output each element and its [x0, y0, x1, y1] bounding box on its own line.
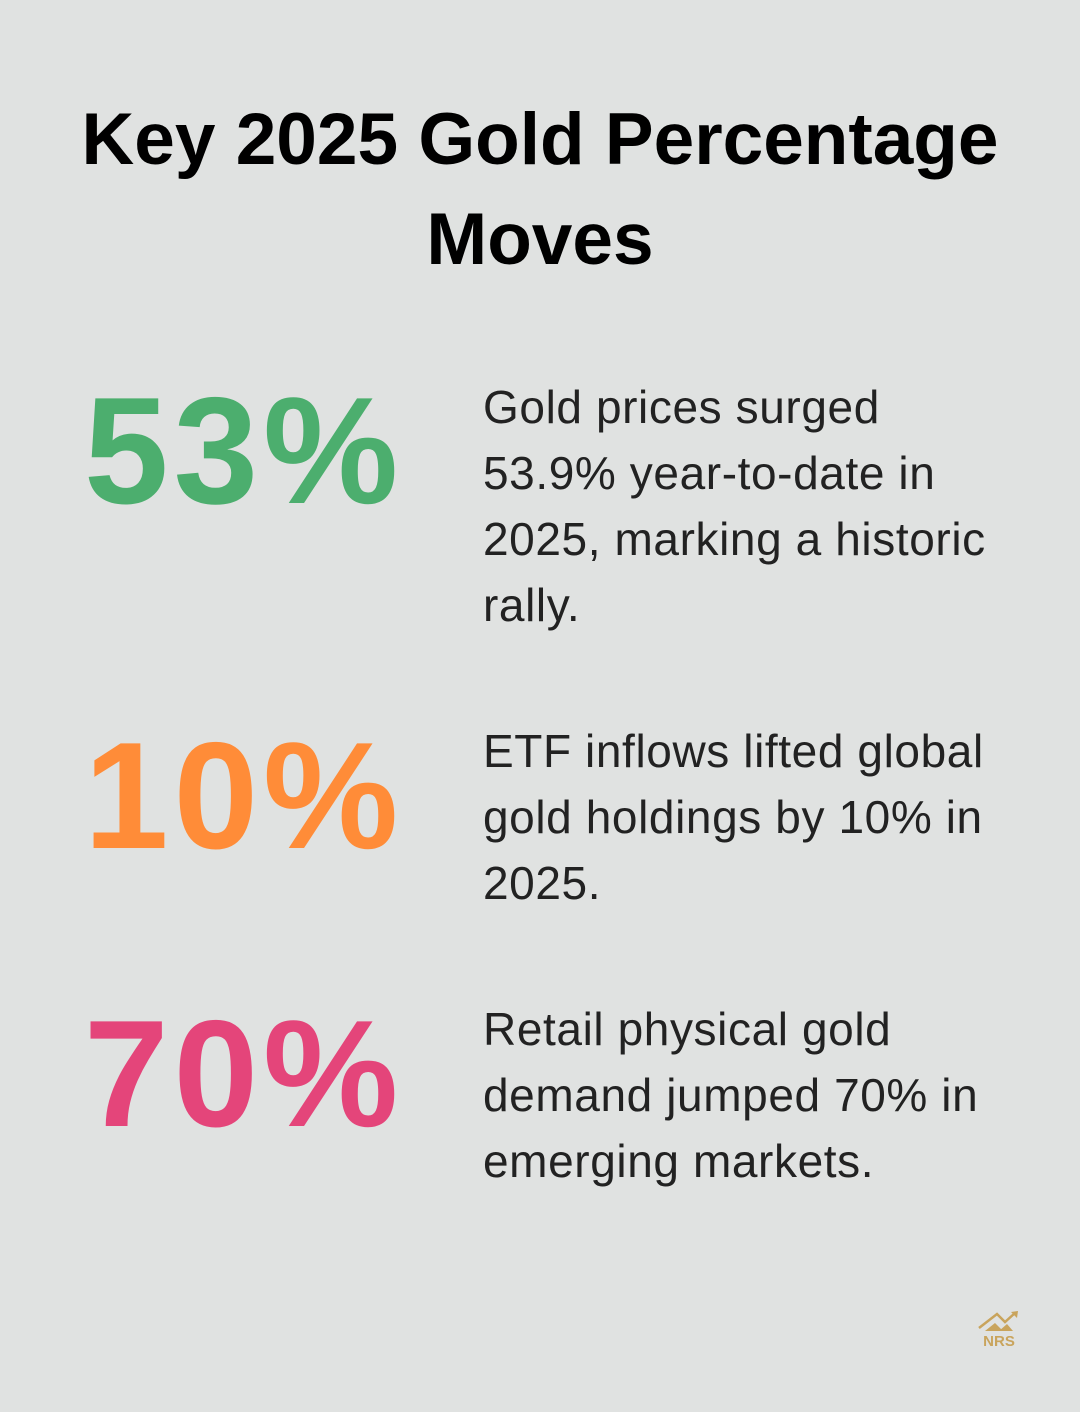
text: 70% description: demand jumped 70% in [483, 1069, 978, 1121]
text: 53% description: 2025, marking a historic [483, 513, 986, 565]
text: 10% description: 2025. [483, 857, 601, 909]
stat: 53%: 53% [84, 366, 403, 536]
text: 53% description [483, 381, 986, 631]
title: Key 2025 Gold Percentage [82, 99, 998, 180]
stat: 10%: 10% [84, 711, 403, 881]
text: 10% description: ETF inflows lifted global [483, 725, 984, 777]
text: 70% description [483, 1003, 978, 1187]
text: 70% description: Retail physical gold [483, 1003, 891, 1055]
stat: 70%: 70% [84, 989, 403, 1159]
text: 53% description: 53.9% year-to-date in [483, 447, 935, 499]
text: 53% description: Gold prices surged [483, 381, 880, 433]
text: 10% description [483, 725, 984, 909]
text: 70% description: emerging markets. [483, 1135, 874, 1187]
title: Moves [426, 199, 654, 280]
text: 53% description: rally. [483, 579, 580, 631]
text: 10% description: gold holdings by 10% in [483, 791, 983, 843]
title [82, 99, 998, 280]
logo: NRS [978, 1311, 1018, 1350]
logo: NRS: NRS [983, 1333, 1015, 1350]
